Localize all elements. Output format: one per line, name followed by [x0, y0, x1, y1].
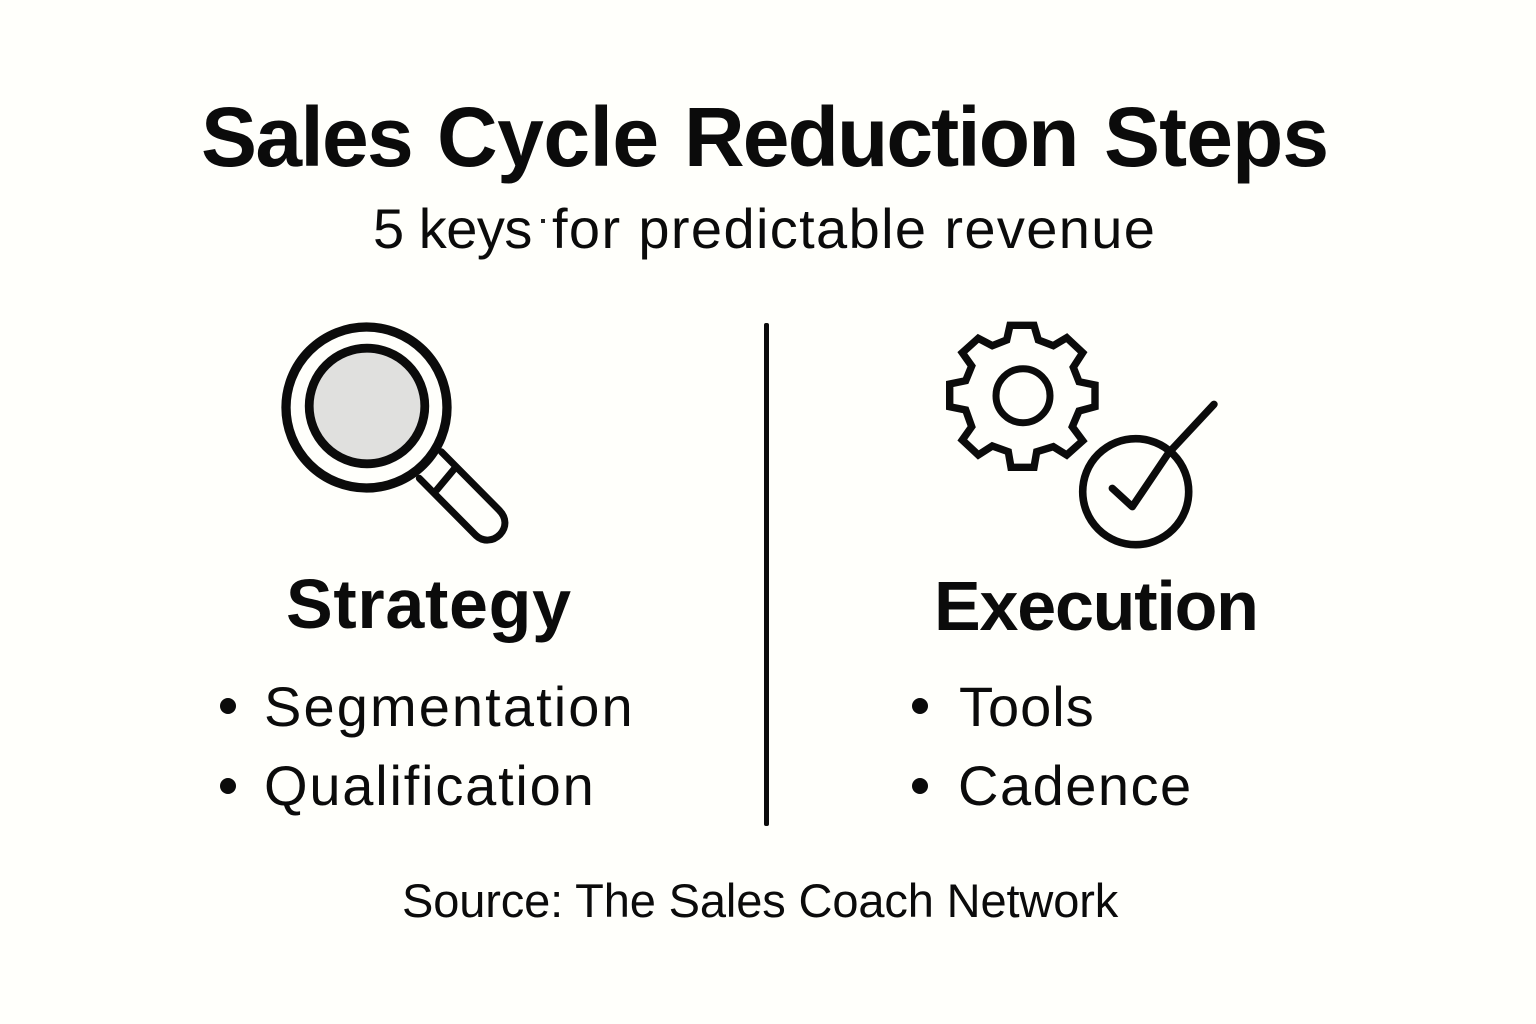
list: strategy: Qualification: [264, 754, 596, 817]
title: Reduction: [684, 90, 1078, 184]
heading: strategy: Strategy: [286, 565, 572, 643]
list: strategy: Segmentation: [264, 675, 635, 738]
source note: Source: The Sales Coach Network: [402, 874, 1118, 927]
list: execution: [912, 675, 1193, 817]
icon: gear and check: [946, 322, 1218, 548]
list: strategy: [220, 675, 635, 817]
subtitle: for predictable revenue: [552, 197, 1156, 260]
list: execution: Cadence: [958, 754, 1193, 817]
icon: magnifying glass: [281, 322, 508, 544]
title: Sales: [201, 90, 412, 184]
divider line: [764, 323, 769, 826]
heading: execution: Execution: [934, 567, 1258, 645]
list: execution: Tools: [959, 675, 1095, 738]
title: Steps: [1104, 90, 1328, 184]
subtitle: 5 keys: [373, 197, 532, 260]
title: [201, 90, 1328, 184]
title: Cycle: [437, 90, 659, 184]
